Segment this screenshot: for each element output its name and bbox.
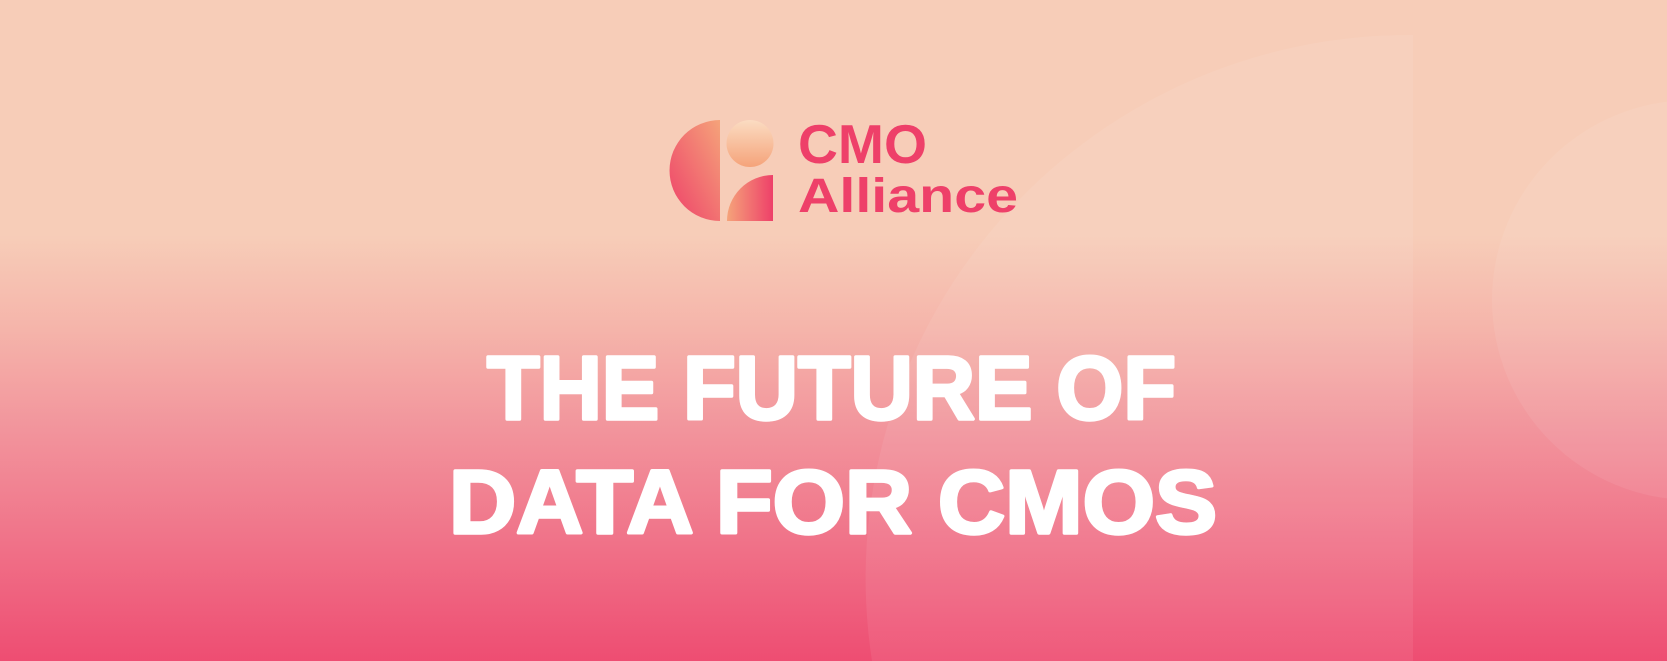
- decorative shape: faint half disc: [866, 35, 1413, 661]
- logo text: Alliance: [798, 170, 1018, 223]
- decorative shape: faint circle: [1492, 100, 1667, 500]
- logo text: [798, 113, 1018, 223]
- logo icon: quarter circle: [727, 175, 773, 221]
- title: DATA FOR CMOS: [449, 453, 1217, 553]
- logo icon: half disc: [670, 120, 720, 221]
- title: THE FUTURE OF: [487, 339, 1176, 439]
- title: [449, 339, 1217, 553]
- logo icon: circle: [726, 120, 774, 167]
- logo text: CMO: [798, 113, 927, 175]
- logo: [670, 113, 1018, 223]
